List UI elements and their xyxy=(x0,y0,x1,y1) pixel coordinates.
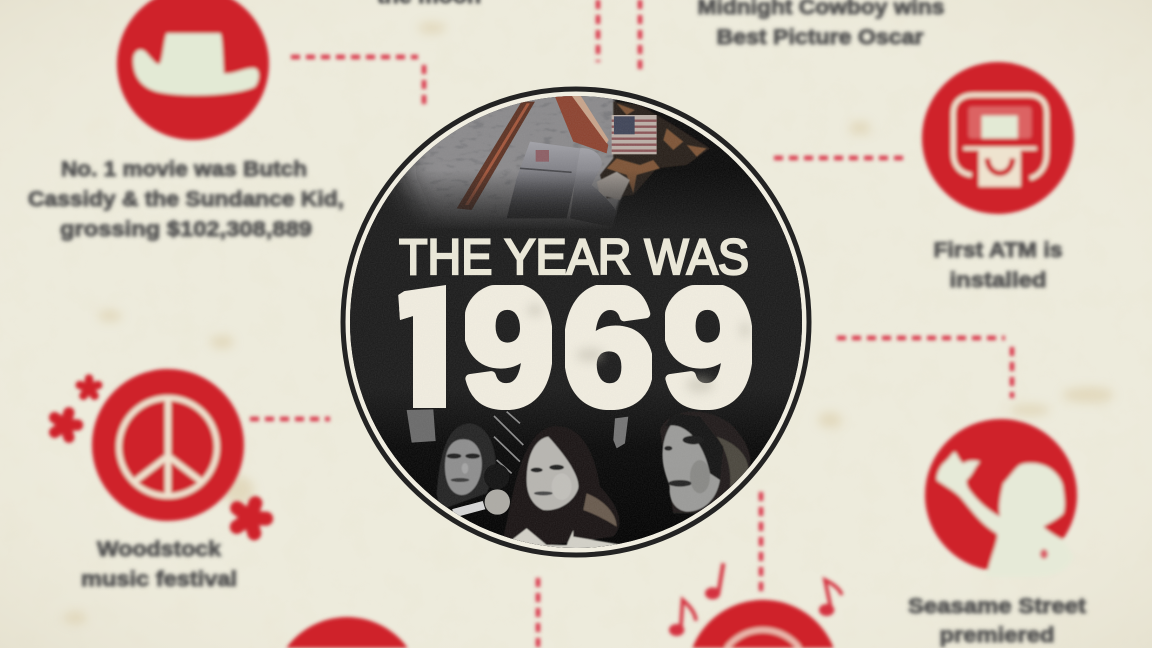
icon: Sesame character xyxy=(925,419,1077,577)
astronaut body xyxy=(570,148,617,227)
lander foil xyxy=(600,102,710,198)
lander leg left xyxy=(457,102,535,210)
caption: movie: Cassidy & the Sundance Kid, xyxy=(28,188,344,211)
dark lander body xyxy=(612,99,799,285)
caption: Woodstock: Woodstock xyxy=(97,538,221,561)
lander leg right xyxy=(555,95,608,153)
icon: cowboy hat xyxy=(117,0,269,140)
icon: music notes xyxy=(669,563,842,636)
heading: 1969 xyxy=(398,285,752,410)
caption: Oscar xyxy=(698,0,944,49)
paper scraps xyxy=(407,409,436,443)
icon: peace sign xyxy=(92,369,244,521)
panel: bottom left icon xyxy=(286,617,408,648)
icon: music disc xyxy=(692,600,834,648)
striped tie xyxy=(494,412,523,473)
caption: movie: No. 1 movie was Butch xyxy=(61,158,307,181)
photo: astronaut on the moon xyxy=(350,96,802,388)
heading: 1969: 9 xyxy=(462,254,555,440)
right woman xyxy=(660,412,750,513)
caption: movie xyxy=(28,158,344,241)
panel: ATM xyxy=(922,62,1074,292)
caption: Sesame Street: premiered xyxy=(940,624,1054,647)
microphone xyxy=(453,464,510,515)
panel: music xyxy=(669,563,842,648)
heading: 1969: 6 xyxy=(562,254,655,440)
caption: Oscar: Best Picture Oscar xyxy=(716,26,924,49)
central badge xyxy=(320,70,820,558)
left woman xyxy=(437,423,496,510)
ink stains on numerals xyxy=(527,304,750,393)
caption: Sesame Street xyxy=(908,595,1086,647)
heading: THE YEAR WAS: THE YEAR WAS xyxy=(399,229,749,285)
film grain xyxy=(340,90,820,555)
middle woman xyxy=(503,426,623,550)
icon: flowers xyxy=(55,379,270,535)
connector dashes xyxy=(250,0,1012,648)
caption: ATM xyxy=(934,239,1062,292)
outer ring xyxy=(343,89,809,555)
panel: movie xyxy=(28,0,344,241)
flag xyxy=(612,115,657,154)
icon: ATM machine xyxy=(922,62,1074,214)
caption: movie: grossing $102,308,889 xyxy=(60,218,312,241)
disc xyxy=(350,96,802,548)
caption: ATM: First ATM is xyxy=(934,239,1062,262)
panel: Woodstock xyxy=(55,369,270,591)
photo: three women xyxy=(360,388,792,548)
caption: ATM: installed xyxy=(950,269,1046,292)
caption: Sesame Street: Seasame Street xyxy=(908,595,1086,618)
panel: Sesame Street xyxy=(908,419,1086,647)
astronaut backpack xyxy=(507,142,580,218)
caption: Woodstock: music festival xyxy=(81,568,237,591)
heading: 1969: 9 xyxy=(662,254,755,440)
caption: Woodstock xyxy=(81,538,237,591)
heading: 1969: 1 xyxy=(385,258,474,437)
